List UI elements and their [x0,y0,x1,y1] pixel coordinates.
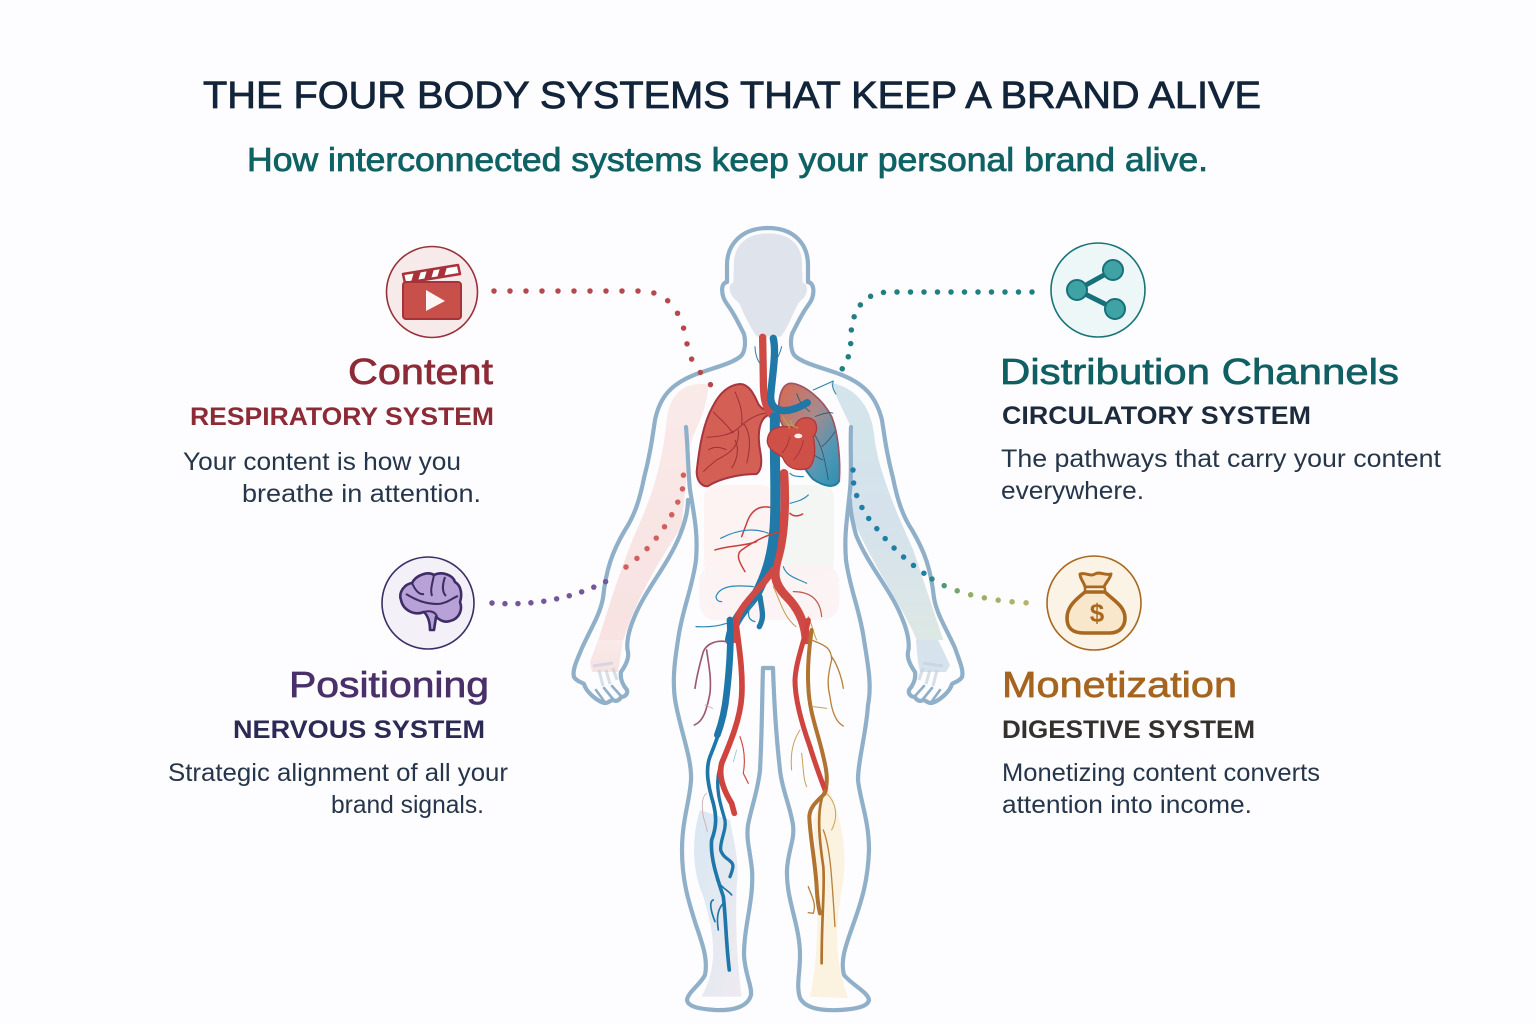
subtitle: How interconnected systems keep your personal brand alive. [247,141,1208,178]
blood vessels: legs [694,620,843,970]
description: distribution: everywhere. [1001,477,1144,505]
panel: monetization [1002,556,1320,819]
icon: brain [382,557,474,649]
description: monetization [1002,759,1320,819]
body outline [574,228,962,1010]
dotted connector: distribution to circulation [838,292,1032,374]
left arm tint [590,384,708,672]
icon: film clapper with play button [386,246,478,338]
title: THE FOUR BODY SYSTEMS THAT KEEP A BRAND ALIVE [203,75,1261,117]
heading: positioning: Positioning [289,664,489,705]
panel: positioning [168,557,508,819]
label: nervous system: NERVOUS SYSTEM [233,716,485,744]
description: content: Your content is how you [183,448,461,476]
left lung [697,384,773,486]
icon: money bag: $ [1090,598,1105,628]
description: content: breathe in attention. [242,480,481,508]
panel: content [183,246,494,508]
label: respiratory system: RESPIRATORY SYSTEM [190,403,494,431]
dotted connector: monetization to digestion [853,470,1032,603]
finger details [593,663,943,686]
description: monetization: attention into income. [1002,791,1252,819]
dotted connector: positioning to nerves [492,473,684,604]
lower leg tints [694,783,848,998]
heading: monetization: Monetization [1002,664,1237,705]
label: digestive system: DIGESTIVE SYSTEM [1002,716,1255,744]
icon: money bag [1047,556,1141,650]
description: positioning [168,759,508,819]
heading: content: Content [348,351,493,392]
icon: share nodes [1051,243,1145,337]
human body figure [574,228,962,1010]
blood vessels: torso [696,337,836,640]
abdomen organ tint [699,485,839,620]
description: content [183,448,481,508]
description: positioning: Strategic alignment of all your [168,759,508,787]
description: monetization: Monetizing content converts [1002,759,1320,787]
description: positioning: brand signals. [331,791,484,819]
right arm tint [830,383,950,672]
head silhouette [730,233,807,337]
panel: distribution channels [1000,243,1441,505]
right lung [779,383,840,486]
heart [767,417,817,470]
description: distribution: The pathways that carry your content [1001,445,1441,473]
label: circulatory system: CIRCULATORY SYSTEM [1002,402,1311,430]
heading: distribution channels: Distribution Channels [1000,351,1399,392]
description: distribution [1001,445,1441,505]
dotted connector: content to lungs [494,291,716,390]
